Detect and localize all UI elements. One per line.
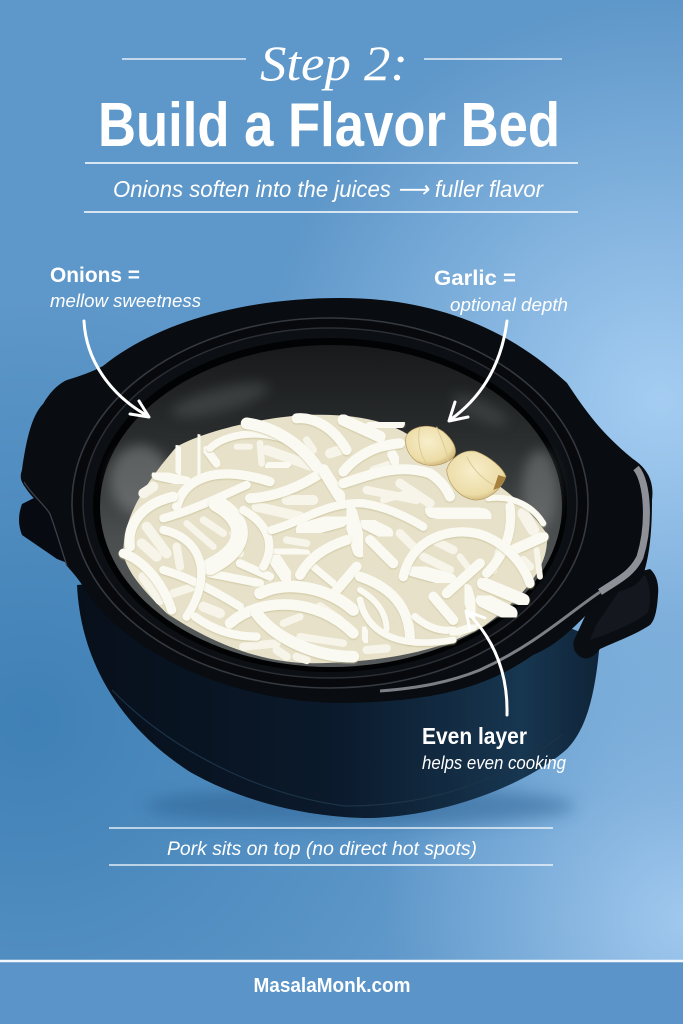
step label: Step 2: xyxy=(260,35,408,91)
front onion pieces xyxy=(123,418,543,657)
callout: even layer xyxy=(422,611,566,773)
garlic cloves xyxy=(406,426,506,500)
subtitle: Onions soften into the juices ⟶ fuller flavor xyxy=(113,176,544,202)
callout: onions: Onions = xyxy=(50,264,140,287)
title: Build a Flavor Bed xyxy=(98,91,560,160)
callout: garlic: optional depth xyxy=(450,295,568,315)
onion base xyxy=(123,415,547,663)
rim outline with handles xyxy=(21,298,652,703)
note: pork on top: Pork sits on top (no direct hot spots) xyxy=(167,839,477,860)
back onion pieces xyxy=(142,440,540,660)
cooker interior xyxy=(100,345,562,667)
header xyxy=(84,35,578,212)
left lower handle xyxy=(19,495,80,568)
arrow: onions xyxy=(84,321,149,417)
slow cooker xyxy=(19,298,658,818)
arrow: even layer xyxy=(466,611,507,715)
footer: MasalaMonk.com xyxy=(254,975,410,997)
callout: garlic xyxy=(434,267,568,421)
cooker body xyxy=(77,560,600,818)
rim rings xyxy=(72,318,588,688)
callout: even layer: helps even cooking xyxy=(422,753,566,773)
arrow: garlic xyxy=(449,321,507,421)
right lower handle xyxy=(573,569,658,658)
onion layer xyxy=(123,415,547,663)
shadow under cooker xyxy=(145,786,575,826)
right grey rim highlight xyxy=(600,468,646,592)
callout: garlic: Garlic = xyxy=(434,267,516,290)
callout: even layer: Even layer xyxy=(422,723,527,749)
callout: onions: mellow sweetness xyxy=(50,291,201,311)
callout: onions xyxy=(50,264,201,417)
